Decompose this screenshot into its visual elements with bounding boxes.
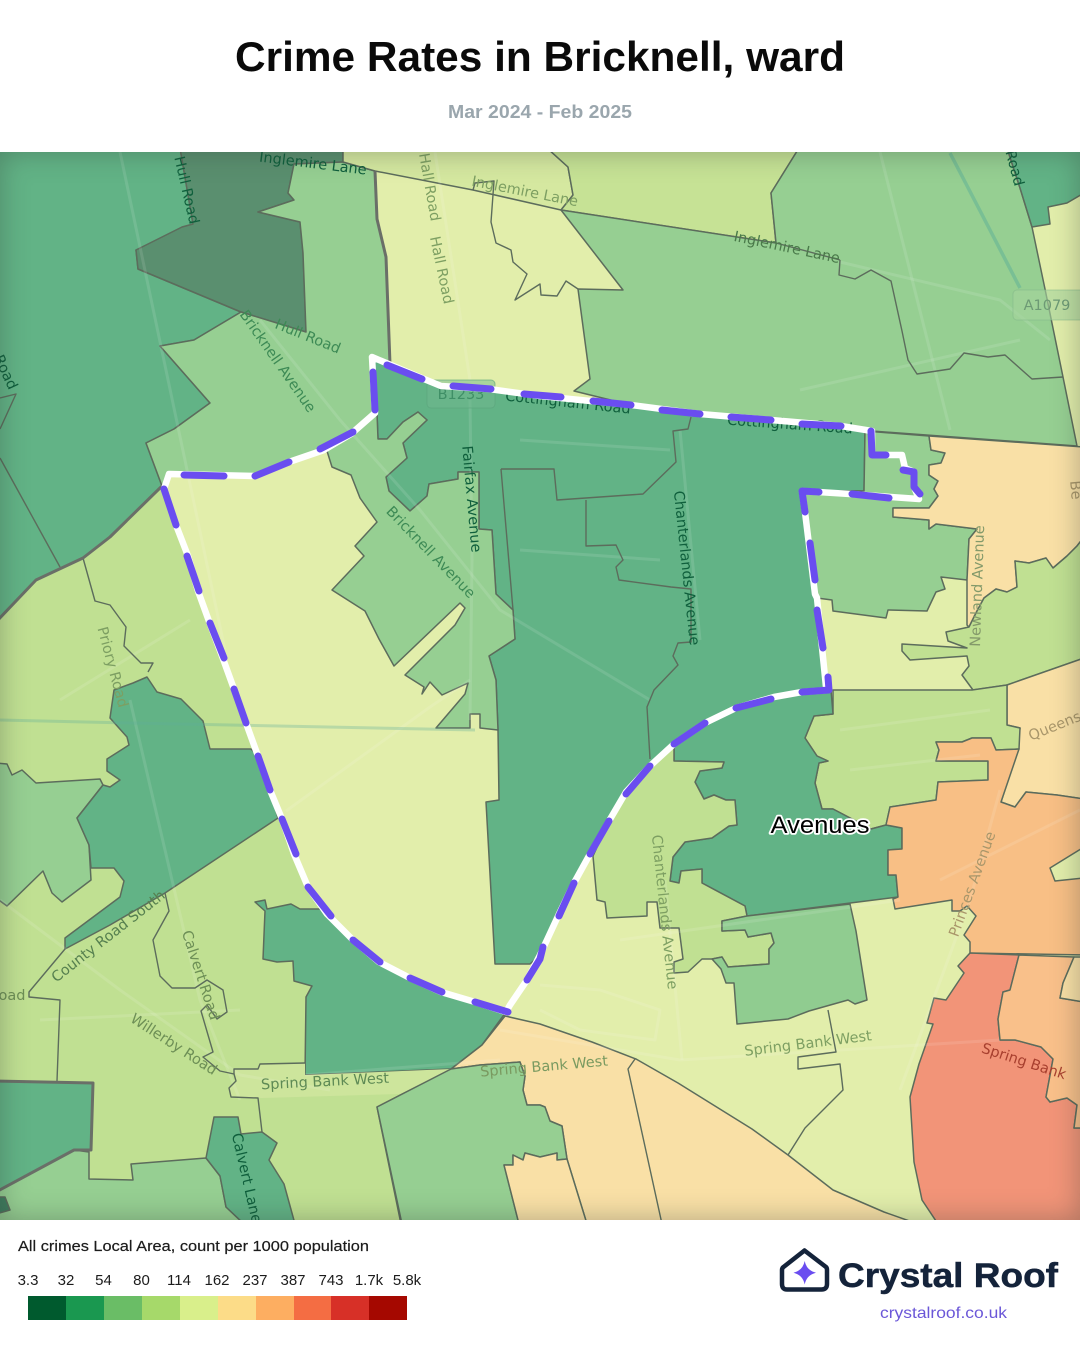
region: bottom-left green [0,1081,93,1192]
region: Spring Bank West strip [229,1063,451,1098]
legend tick values: 1.7k [355,1272,384,1289]
region: corner dark patch [0,1197,10,1214]
road label: Road [1002,149,1026,188]
road label: Chanterlands Avenue [648,834,680,990]
region: south cream [451,1016,918,1224]
legend tick values: 5.8k [393,1272,422,1289]
region: Princes Avenue orange [886,738,1080,955]
title: Crime Rates in Bricknell, ward [235,33,845,80]
place label: Avenues: Avenues [770,812,870,839]
legend tick values: 54 [95,1272,112,1289]
road label: Cottingham Road [504,389,631,418]
region: Spring Bank orange [998,955,1080,1128]
legend tick values: 114 [167,1272,191,1289]
choropleth map [0,148,1080,1225]
region: east yellow green [902,537,1080,690]
road label: Fairfax Avenue [458,445,484,553]
road label: Spring Bank West [480,1053,609,1081]
road shield B1233 [427,380,495,408]
thick boundary strokes [0,171,390,1192]
road label: Hall Road [426,235,456,306]
road label: Hall Road [415,152,443,222]
region: north east light green [561,148,1077,446]
region: Avenues green [670,690,902,916]
thick boundary north [375,171,390,364]
region: north centre light yellow green [547,148,799,243]
road label: Calvert Road [178,929,222,1022]
road label: Inglemire Lane [258,150,368,179]
ward boundary: purple dashes [164,365,920,1012]
region: Avenues yellow green [805,685,1020,829]
logo wordmark: Crystal Roof [838,1257,1059,1295]
road label: Priory Road [94,625,130,709]
legend tick values: 237 [242,1272,268,1289]
canal north-east [950,153,1020,288]
faint road network [0,152,1080,1100]
road shield A1079: A1079 [1024,298,1070,314]
legend tick values: 387 [280,1272,306,1289]
region: west yellow green [0,486,506,1224]
legend tick values: 32 [58,1272,74,1289]
road label: Chanterlands Avenue [670,490,702,646]
thick boundary south-west box [0,1081,93,1192]
road label: Hull Road [273,317,343,357]
road label: Princes Avenue [947,830,999,939]
road label: County Road South [49,888,169,986]
region: Bricknell north light green [146,162,390,486]
logo: Crystal Roof [782,1250,1059,1322]
road label: Willerby Road [127,1011,220,1079]
region: darkest north-west [136,148,343,332]
road label: Bricknell Avenue [236,307,318,416]
road label: Inglemire Lane [732,229,841,267]
logo url: crystalroof.co.uk [880,1305,1008,1322]
region: west light green [0,763,103,906]
region: south small cream [504,1153,587,1224]
ward boundary: white underlay [164,357,919,1012]
road label: Spring Bank West [261,1071,390,1093]
legend tick values: 3.3 [18,1272,38,1289]
region: Spring Bank red [910,953,1080,1224]
region: south light green [377,1062,567,1224]
road label: Bricknell Avenue [382,504,478,602]
region: south-west ward green [255,900,506,1075]
subtitle: date range: Mar 2024 - Feb 2025 [448,102,632,122]
road and place labels [0,149,1080,1225]
road label: Cottingham Road [727,413,853,437]
legend title: All crimes Local Area, count per 1000 population [18,1238,369,1255]
road label: Spring Bank [979,1041,1068,1083]
legend tick values [18,1272,422,1289]
region: east of ward light green [802,431,977,618]
additional boundary lines [0,181,1063,1224]
legend [18,1238,422,1320]
canal west-east [0,720,475,730]
area regions [0,148,1080,1224]
region: small cream patch right [1060,957,1080,1002]
map edge vignette [0,152,1080,1220]
legend tick values: 743 [318,1272,344,1289]
legend tick values: 80 [133,1272,150,1289]
road label: Calvert Lane [228,1132,264,1225]
road shield B1233: B1233 [438,387,484,403]
region: top right green [1007,148,1080,227]
region: Bricknell Avenue strip [327,412,515,730]
region: bottom-left light green [0,1150,244,1224]
region: Chanterlands yellow green [593,744,774,973]
region: south of Avenues light green [712,904,867,1024]
region: Inglemire top strip [343,148,573,210]
legend tick values: 162 [204,1272,230,1289]
legend colour scale [28,1296,407,1320]
canals and water lines [0,153,1020,730]
region: Priory Road green [65,677,278,949]
icon: house with star [782,1250,827,1290]
road label: Newland Avenue [968,525,988,647]
thick boundary west [0,486,162,622]
region: Queens cream [1001,658,1080,807]
region: Calvert Lane green [206,1117,295,1224]
region: north-west large green [0,148,241,622]
region: Newland cream [893,436,1080,627]
road shield A1079 [1013,290,1080,320]
road label: Spring Bank West [744,1028,873,1060]
region: ward centre green [372,357,872,964]
road label: Inglemire Lane [470,174,579,210]
road label: Hull Road [170,155,202,226]
